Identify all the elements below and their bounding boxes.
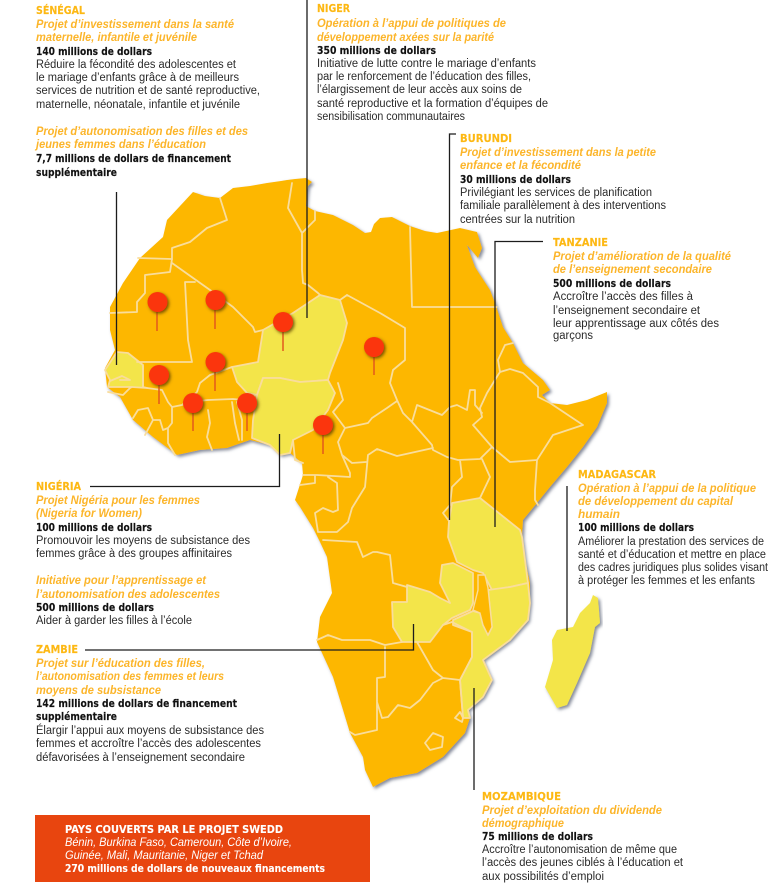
text: Senegal: supplémentaire [36,166,117,179]
text: Nigeria: l’autonomisation des adolescentes [36,589,220,601]
pin [313,415,333,454]
text: Niger: développement axées sur la parité [317,32,495,44]
text: Madagascar: des cadres juridiques plus solides visant [578,562,769,574]
callout: SWEDD project: 270 millions de dollars de nouveaux financements [65,862,325,875]
leader: Senegal [116,192,118,365]
highlighted countries [105,295,530,718]
text: Burundi: centrées sur la nutrition [460,214,575,226]
text: Senegal: services de nutrition et de santé reproductive, [36,85,260,97]
text: Senegal: le mariage d’enfants grâce à de meilleurs [36,72,239,84]
text: Nigeria: Aider à garder les filles à l’école [36,615,192,627]
text: Madagascar: Opération à l’appui de la politique [578,483,757,495]
text: Tanzania: de l’enseignement secondaire [553,264,713,276]
text: Zambia: 142 millions de dollars de financement [36,697,237,710]
leader: Nigeria [90,434,280,486]
text: Madagascar: 100 millions de dollars [578,521,694,534]
text: Burundi: 30 millions de dollars [460,173,571,186]
leader: Niger [306,0,308,318]
text: Zambia: Élargir l’appui aux moyens de subsistance des [36,724,264,737]
text: Zambia: femmes et accroître l’accès des adolescentes [36,738,261,750]
pin [148,292,168,331]
text: Tanzania: Accroître l’accès des filles à [553,291,694,303]
text: Nigeria: (Nigeria for Women) [36,508,142,520]
text: Senegal: maternelle, néonatale, infantile et juvénile [36,99,240,111]
location pins [148,290,384,454]
text: Nigeria: 500 millions de dollars [36,601,154,614]
text: Senegal: SÉNÉGAL [36,4,85,17]
text: Burundi: familiale parallèlement à des interventions [460,200,666,212]
text: Zambia [36,643,264,764]
Lake / Malawi [473,575,492,635]
text: Tanzania: garçons [553,330,593,342]
Senegal [105,352,147,388]
continent [105,178,607,787]
text: Tanzania: leur apprentissage aux côtés des [553,318,719,330]
text: Madagascar: à protéger les femmes et les enfants [578,575,755,587]
text: Madagascar: de développement du capital [578,496,734,508]
leader: Tanzania [495,242,543,527]
text: Burundi: Projet d’investissement dans la petite [460,147,657,159]
text: Tanzania: Projet d’amélioration de la qualité [553,251,732,263]
text: Tanzania: l’enseignement secondaire et [553,305,701,317]
leader: Madagascar [566,486,568,631]
Madagascar [545,595,600,708]
text: Zambia: Projet sur l’éducation des filles, [36,658,205,670]
text: Nigeria: femmes grâce à des groupes affinitaires [36,548,232,560]
country borders [108,183,583,750]
text: Niger: par le renforcement de l’éducation des filles, [317,71,531,83]
pin [149,365,169,404]
text: Burundi: BURUNDI [460,132,512,145]
text: Niger: Initiative de lutte contre le mariage d’enfants [317,58,536,70]
text: Madagascar: santé et d’éducation et mettre en place [578,549,766,561]
pin [364,337,384,375]
text: Burundi: Privilégiant les services de planification [460,187,652,199]
callout: SWEDD project: Guinée, Mali, Mauritanie, Niger et Tchad [65,850,264,862]
text: Senegal: Projet d’autonomisation des filles et des [36,126,248,138]
text: Mozambique: aux possibilités d’emploi [482,871,604,883]
text: Zambia: supplémentaire [36,710,117,723]
map of Africa [105,178,607,787]
text: Nigeria: 100 millions de dollars [36,521,152,534]
text: Madagascar: humain [578,509,620,521]
pin [273,312,293,351]
text: Burundi [460,132,666,226]
text: Niger: sensibilisation communautaires [317,111,465,123]
text: Madagascar [578,468,769,587]
text: Niger: 350 millions de dollars [317,44,436,57]
callout: SWEDD project: PAYS COUVERTS PAR LE PROJET SWEDD [65,823,283,836]
text: Senegal: 140 millions de dollars [36,45,152,58]
Mozambique [453,583,530,718]
callout: SWEDD project: Bénin, Burkina Faso, Cameroun, Côte d’Ivoire, [65,837,292,849]
text: Madagascar: Améliorer la prestation des services de [578,536,764,548]
text: Senegal: maternelle, infantile et juvénile [36,32,198,44]
Tanzania [448,498,528,590]
pin [237,393,257,431]
text: Madagascar: MADAGASCAR [578,468,656,481]
text: Niger: Opération à l’appui de politiques de [317,18,507,30]
pin [206,290,226,329]
leader: Zambia [85,624,414,650]
text: Mozambique: Accroître l’autonomisation de même que [482,844,677,856]
text: Mozambique: démographique [482,818,565,830]
text: Mozambique: Projet d’exploitation du dividende [482,805,663,817]
text: Nigeria: NIGÉRIA [36,480,81,493]
text: Zambia: l’autonomisation des femmes et leurs [36,671,224,683]
leader: Burundi [450,134,456,520]
text: Nigeria: Promouvoir les moyens de subsistance des [36,535,250,547]
Zambia [392,563,473,642]
text: Tanzania [553,236,732,342]
Gambia inlet [110,376,130,381]
text: Tanzania: 500 millions de dollars [553,277,671,290]
text: Zambia: ZAMBIE [36,643,78,656]
text: Mozambique [482,790,684,883]
text: Zambia: moyens de subsistance [36,685,162,697]
text: Senegal: Projet d’investissement dans la santé [36,19,235,31]
text: Burundi: enfance et la fécondité [460,160,582,172]
leader: Mozambique [473,688,475,790]
pin [183,393,203,431]
text: Senegal [34,4,260,179]
text: Niger: NIGER [317,2,350,15]
leader lines [85,0,567,790]
text: Mozambique: MOZAMBIQUE [482,790,561,803]
pin [206,352,226,391]
text: Senegal: Réduire la fécondité des adolescentes et [36,59,237,71]
text: Niger [317,2,548,123]
text: Nigeria: Projet Nigéria pour les femmes [36,495,200,507]
Niger [232,295,347,395]
callout: SWEDD project [35,815,370,882]
text: Niger: santé reproductive et la formation d’équipes de [317,98,548,110]
text: Senegal: jeunes femmes dans l’éducation [34,139,206,151]
text: Mozambique: l’accès des jeunes ciblés à l’éducation et [482,857,684,869]
text: Zambia: défavorisées à l’enseignement secondaire [36,752,245,764]
Nigeria [252,378,335,455]
text: Nigeria [36,480,250,627]
text: Mozambique: 75 millions de dollars [482,830,593,843]
text: Nigeria: Initiative pour l’apprentissage et [36,575,207,587]
text: Senegal: 7,7 millions de dollars de financement [36,152,231,165]
text: Tanzania: TANZANIE [553,236,608,249]
text: Niger: l’élargissement de leur accès aux soins de [317,84,522,96]
